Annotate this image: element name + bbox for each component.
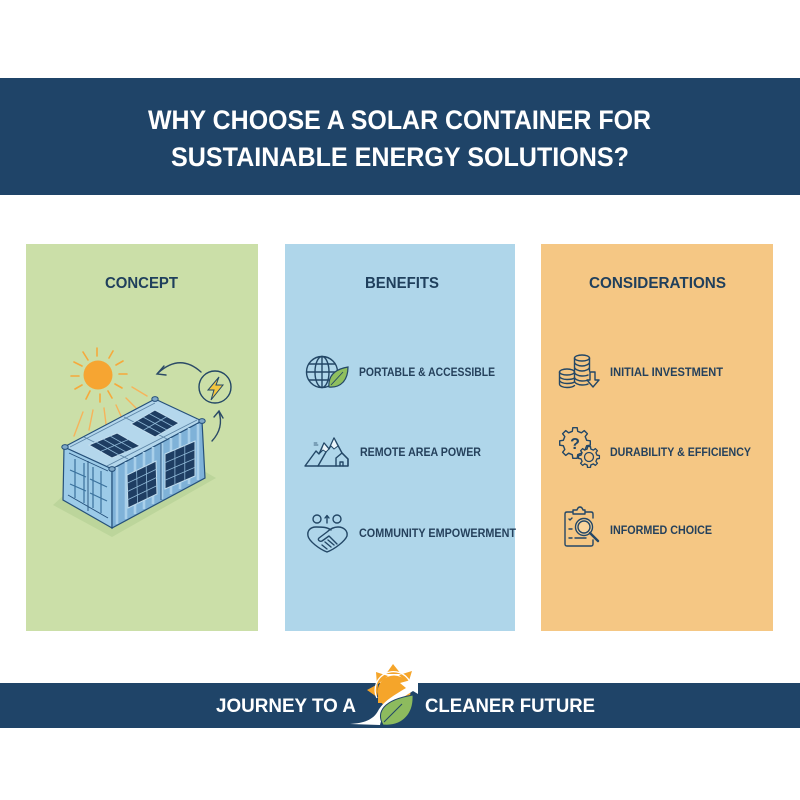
benefit: remote area power: REMOTE AREA POWER xyxy=(360,447,482,459)
consideration: initial investment: INITIAL INVESTMENT xyxy=(610,367,723,379)
concept heading: CONCEPT xyxy=(105,275,178,292)
ground shadow xyxy=(53,470,216,537)
solar panel: roof front xyxy=(89,433,140,458)
arrow: container to energy xyxy=(212,411,223,441)
solar panel: side left xyxy=(127,461,157,508)
solar panel: side right xyxy=(165,441,195,489)
solar panel: roof back xyxy=(131,410,179,437)
icon: gears with question mark xyxy=(560,428,599,467)
icon: community handshake xyxy=(308,515,347,552)
corner castings xyxy=(62,397,205,471)
title: SUSTAINABLE ENERGY SOLUTIONS? xyxy=(171,142,629,172)
benefit: community empowerment: COMMUNITY EMPOWERMENT xyxy=(359,528,516,540)
arrow: energy to sun xyxy=(157,363,201,375)
roof details xyxy=(70,403,197,466)
panel: considerations xyxy=(541,244,773,631)
consideration: informed choice: INFORMED CHOICE xyxy=(610,525,712,537)
logo arrow xyxy=(350,678,418,725)
small gear xyxy=(579,447,599,467)
benefit: portable and accessible: PORTABLE & ACCESSIBLE xyxy=(359,367,495,379)
footer text: cleaner future: CLEANER FUTURE xyxy=(425,696,595,717)
icon: sun with rays xyxy=(71,348,147,436)
door details xyxy=(68,453,108,518)
footer banner xyxy=(0,664,800,728)
icon: clipboard and magnifier xyxy=(565,507,598,546)
question mark: ? xyxy=(570,436,580,453)
consideration: durability and efficiency: DURABILITY & EFFICIENCY xyxy=(610,447,751,459)
icon: energy bolt badge xyxy=(199,371,231,403)
considerations heading: CONSIDERATIONS xyxy=(589,275,726,292)
logo leaf xyxy=(381,695,413,725)
logo: sun, arrow and leaf xyxy=(350,664,418,725)
icon: mountains and house xyxy=(305,438,348,466)
logo sun ring xyxy=(375,672,410,698)
panel: benefits xyxy=(285,244,516,631)
icon: coins xyxy=(560,355,599,388)
title: WHY CHOOSE A SOLAR CONTAINER FOR xyxy=(148,105,651,135)
footer text: journey: JOURNEY TO A xyxy=(216,696,356,717)
solar container xyxy=(62,397,205,528)
header banner xyxy=(0,78,800,195)
container faces xyxy=(64,399,202,469)
benefits heading: BENEFITS xyxy=(365,275,439,292)
panel: concept xyxy=(26,244,258,631)
large gear xyxy=(560,428,590,458)
side corrugation xyxy=(117,424,198,524)
icon: globe and leaf xyxy=(306,356,348,388)
logo sun xyxy=(367,664,412,708)
title xyxy=(148,105,651,172)
